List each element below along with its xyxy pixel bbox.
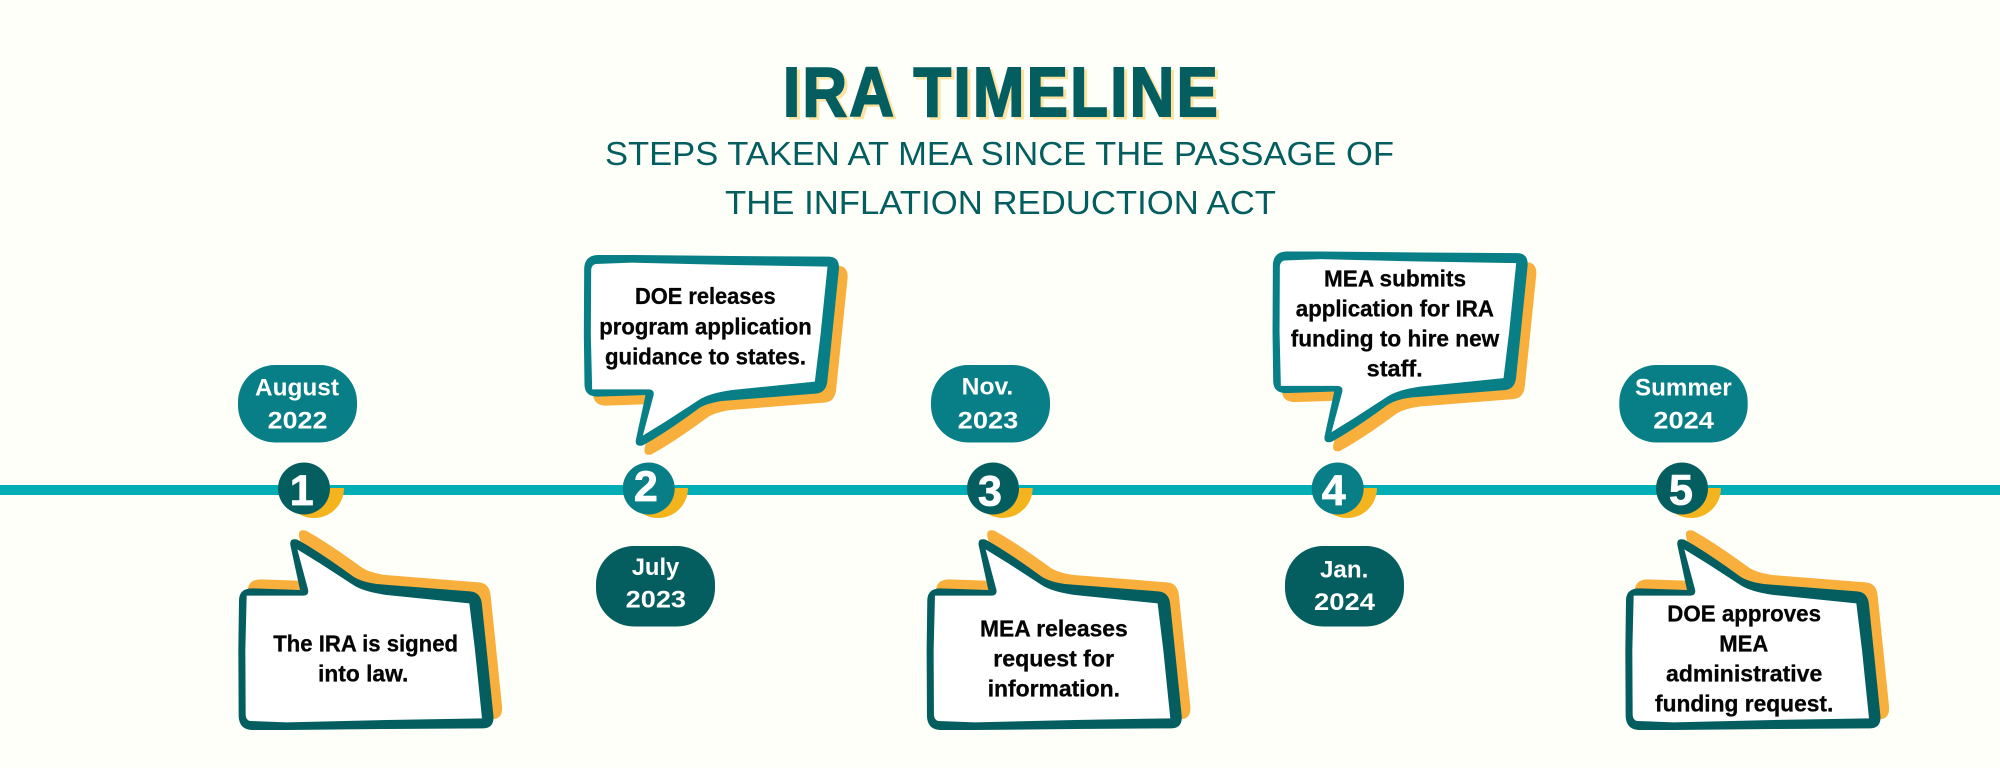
bubble 2 text: DOE releases [635, 283, 776, 309]
speech bubble 4 [1273, 252, 1536, 451]
bubble 5 text: funding request. [1655, 691, 1833, 717]
step 4 marker: 4 [1322, 467, 1346, 515]
timeline line [0, 485, 2000, 495]
subtitle [605, 136, 1394, 222]
speech bubble 5 [1625, 530, 1889, 730]
step 3 marker: 3 [978, 468, 1002, 516]
bubble 5 text: DOE approves [1667, 601, 1821, 627]
bubble 3 text: request for [993, 646, 1114, 672]
bubble 2 text: guidance to states. [605, 343, 806, 369]
date pill: Summer 2024 [1619, 365, 1748, 442]
step 5 marker: 5 [1669, 466, 1693, 514]
bubble 4 text [1291, 266, 1499, 382]
step 5 marker [1656, 462, 1721, 518]
date pill: Jan. 2024 [1285, 546, 1404, 626]
date pill: Jan. 2024: 2024 [1314, 589, 1375, 616]
bubble 1 text [273, 631, 458, 687]
date pill: Summer 2024: Summer [1635, 375, 1732, 402]
bubble 4 text: application for IRA [1296, 296, 1494, 322]
date pill: July 2023: 2023 [626, 587, 686, 614]
bubble 2 text: program application [599, 313, 812, 339]
date pill: July 2023: July [632, 554, 680, 581]
bubble 3 text: information. [988, 676, 1120, 702]
bubble 5 text: MEA [1719, 631, 1768, 657]
speech bubble 2 [584, 255, 848, 455]
step 2 marker: 2 [634, 463, 658, 511]
step 1 marker: 1 [290, 467, 314, 515]
speech bubble 3 [927, 530, 1190, 730]
step 4 marker [1312, 462, 1377, 518]
date pill: August 2022 [238, 365, 357, 442]
subtitle: THE INFLATION REDUCTION ACT [725, 185, 1276, 222]
bubble 5 text [1655, 601, 1833, 717]
bubble 4 text: MEA submits [1324, 266, 1466, 292]
title: IRA TIMELINE [786, 55, 1221, 133]
subtitle: STEPS TAKEN AT MEA SINCE THE PASSAGE OF [605, 136, 1394, 173]
bubble 1 text: The IRA is signed [273, 631, 458, 657]
bubble 2 text [599, 283, 812, 369]
title: IRA TIMELINE [783, 52, 1218, 131]
bubble 4 text: staff. [1367, 356, 1423, 382]
date pill: August 2022: August [255, 375, 339, 402]
bubble 5 text: administrative [1666, 661, 1822, 687]
date pill: Summer 2024: 2024 [1653, 407, 1714, 434]
date pill: August 2022: 2022 [268, 407, 327, 434]
bubble 1 text: into law. [318, 661, 408, 687]
bubble 3 text [980, 616, 1128, 702]
date pill: Nov. 2023 [931, 365, 1050, 442]
speech bubble 1 [238, 530, 502, 730]
bubble 4 text: funding to hire new [1291, 326, 1499, 352]
date pill: Nov. 2023: Nov. [962, 373, 1013, 400]
step 3 marker [967, 462, 1033, 518]
step 1 marker [278, 462, 344, 518]
date pill: July 2023 [596, 546, 715, 626]
bubble 3 text: MEA releases [980, 616, 1128, 642]
date pill: Nov. 2023: 2023 [958, 407, 1018, 434]
date pill: Jan. 2024: Jan. [1320, 556, 1368, 583]
step 2 marker [623, 462, 688, 518]
